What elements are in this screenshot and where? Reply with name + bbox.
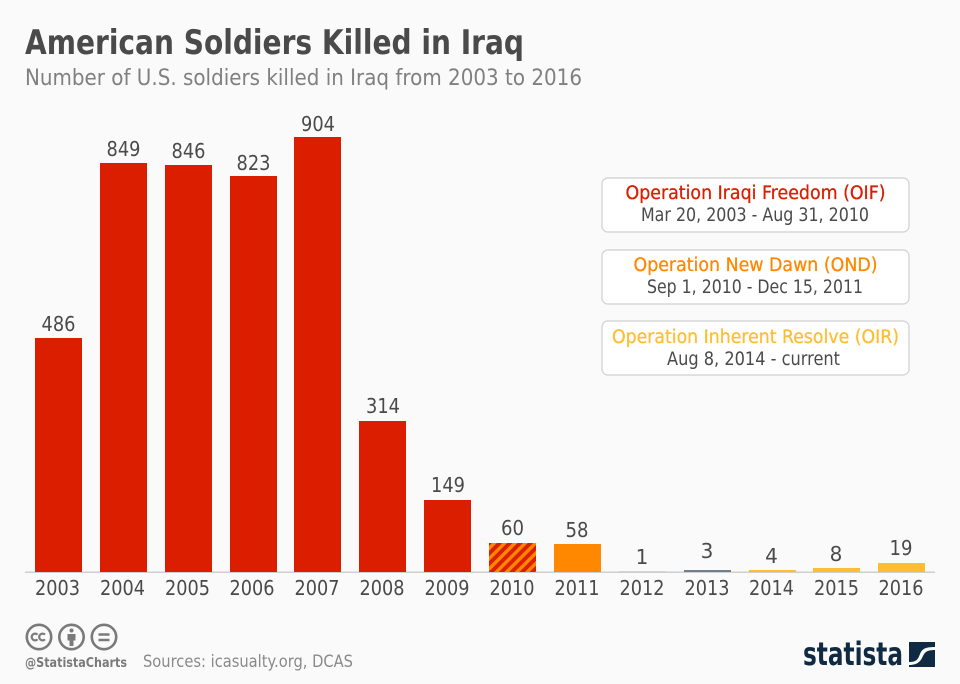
bar 2014: 2014 (749, 576, 794, 600)
bar 2007: 2007 (294, 576, 340, 600)
bar 2010: 2010 (490, 576, 534, 600)
legend: Operation New Dawn: Operation New Dawn (OND) (634, 255, 878, 276)
bar 2004 (100, 137, 147, 600)
bar chart (25, 112, 935, 600)
icon: creative commons licence (27, 625, 116, 649)
bar 2015 (813, 542, 860, 600)
bar 2012 (619, 545, 666, 600)
bar 2012: 1 (636, 545, 648, 569)
bar 2008 (359, 394, 406, 600)
bar 2016 (878, 536, 925, 600)
logo: statista: statista (803, 635, 903, 673)
legend: Operation Iraqi Freedom (602, 178, 909, 232)
bar 2005: 846 (172, 139, 206, 163)
subtitle: Number of U.S. soldiers killed in Iraq from 2003 to 2016 (25, 66, 582, 91)
bar 2016: 2016 (878, 576, 924, 600)
legend: Operation Inherent Resolve: Operation Inherent Resolve (OIR) (612, 327, 899, 348)
bar 2004: 2004 (100, 576, 145, 600)
bar 2014 (749, 544, 796, 600)
legend: Operation Inherent Resolve: Aug 8, 2014 - current (667, 349, 840, 370)
bar 2013: 3 (701, 539, 713, 563)
bar 2008: 2008 (360, 576, 404, 600)
bar 2006: 823 (236, 151, 270, 175)
bar 2015: 8 (830, 542, 842, 566)
bar 2007: 904 (301, 112, 335, 136)
icon: statista mark (909, 642, 935, 667)
bar 2003: 2003 (35, 576, 80, 600)
icon: no derivatives (92, 625, 116, 649)
bar 2010 (489, 516, 536, 600)
title: American Soldiers Killed in Iraq (25, 23, 524, 63)
credit handle: @StatistaCharts (25, 656, 127, 671)
bar 2011 (554, 518, 601, 600)
bar 2009 (424, 473, 471, 600)
bar 2010: 60 (501, 516, 524, 540)
bar 2007 (294, 112, 341, 600)
legend: Operation Iraqi Freedom: Operation Iraqi Freedom (OIF) (626, 183, 886, 204)
bar 2003: 486 (42, 312, 76, 336)
bar 2012: 2012 (620, 576, 664, 600)
bar 2015: 2015 (814, 576, 859, 600)
bar 2011: 58 (566, 518, 588, 542)
legend: Operation Iraqi Freedom: Mar 20, 2003 - Aug 31, 2010 (641, 205, 869, 226)
legend: Operation New Dawn: Sep 1, 2010 - Dec 15, 2011 (647, 277, 863, 298)
bar 2005 (165, 139, 212, 600)
legend: Operation Inherent Resolve (602, 321, 909, 375)
bar 2004: 849 (106, 137, 140, 161)
bar 2016: 19 (890, 536, 912, 560)
bar 2008: 314 (366, 394, 400, 418)
icon: attribution (59, 625, 84, 649)
bar 2006 (230, 151, 277, 600)
bar 2013 (684, 539, 731, 600)
legend: Operation New Dawn (602, 250, 909, 304)
bar 2009: 149 (431, 473, 465, 497)
axis baseline (25, 572, 935, 573)
bar 2006: 2006 (230, 576, 274, 600)
bar 2014: 4 (765, 544, 778, 568)
bar 2005: 2005 (165, 576, 210, 600)
bar 2003 (35, 312, 82, 600)
bar 2011: 2011 (554, 576, 600, 600)
bar 2009: 2009 (424, 576, 470, 600)
source: Sources: icasualty.org, DCAS (143, 652, 353, 672)
icon: cc (27, 625, 51, 649)
bar 2013: 2013 (684, 576, 730, 600)
